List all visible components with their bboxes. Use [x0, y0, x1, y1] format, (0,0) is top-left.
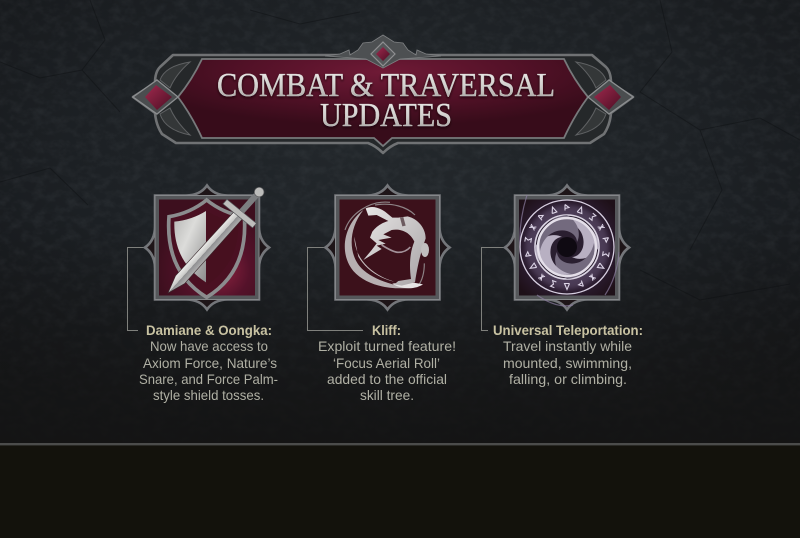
text block: Kliff: ‘Focus Aerial Roll’: [333, 355, 440, 371]
text block: Damiane and Oongka: Damiane & Oongka:: [146, 322, 272, 338]
banner title text: [217, 67, 555, 134]
title banner: [133, 35, 633, 153]
banner metal frame: [133, 55, 633, 153]
connector line: Universal Teleportation: [482, 248, 506, 330]
text block: Damiane and Oongka: style shield tosses.: [153, 387, 264, 403]
text block: Damiane and Oongka: [139, 322, 278, 403]
left gem: [133, 80, 178, 114]
acrobat head: [421, 243, 429, 257]
text block: Kliff: added to the official: [327, 371, 447, 387]
outer wisps: [520, 195, 619, 306]
text block: Damiane and Oongka: Now have access to: [150, 338, 268, 354]
connector line: Kliff: [308, 248, 363, 330]
icon: acrobat aerial roll: [326, 186, 450, 310]
swirl crescents: [345, 202, 424, 288]
banner title text: COMBAT & TRAVERSAL: [217, 67, 555, 104]
icon frame: [505, 186, 629, 310]
rune ring: [525, 204, 609, 290]
icon: teleport portal: [505, 186, 629, 310]
icon: shield and sword: [145, 176, 276, 310]
shield: [169, 200, 245, 297]
text block: Kliff: Kliff:: [372, 322, 401, 338]
icon frame: [326, 186, 450, 310]
connector line: Damiane and Oongka: [128, 248, 146, 330]
portal swirl and rune ring: [520, 195, 619, 306]
spiral arms: [535, 215, 599, 279]
text block: Universal Teleportation: falling, or climbing.: [509, 371, 627, 387]
right gem: [588, 80, 633, 114]
banner crown ornament: [325, 35, 441, 68]
banner crimson plate: [178, 59, 588, 146]
bottom dark band: [0, 445, 800, 538]
divider line: [0, 443, 800, 445]
banner title text: UPDATES: [320, 97, 452, 134]
acrobat figure and swirl: [345, 202, 429, 288]
acrobat body: [363, 207, 426, 286]
sword: [154, 176, 276, 306]
text block: Kliff: [318, 322, 456, 403]
text block: Universal Teleportation: [493, 322, 643, 387]
text block: Kliff: Exploit turned feature!: [318, 338, 456, 354]
text block: Damiane and Oongka: Snare, and Force Palm-: [139, 371, 278, 387]
text block: Damiane and Oongka: Axiom Force, Nature’s: [143, 355, 277, 371]
text block: Universal Teleportation: Travel instantly while: [503, 338, 632, 354]
waist band: [400, 217, 406, 226]
text block: Kliff: skill tree.: [360, 387, 414, 403]
text block: Universal Teleportation: Universal Teleportation:: [493, 322, 643, 338]
banner side filigree: [160, 62, 606, 135]
text block: Universal Teleportation: mounted, swimming,: [503, 355, 632, 371]
icon frame: [145, 186, 269, 310]
